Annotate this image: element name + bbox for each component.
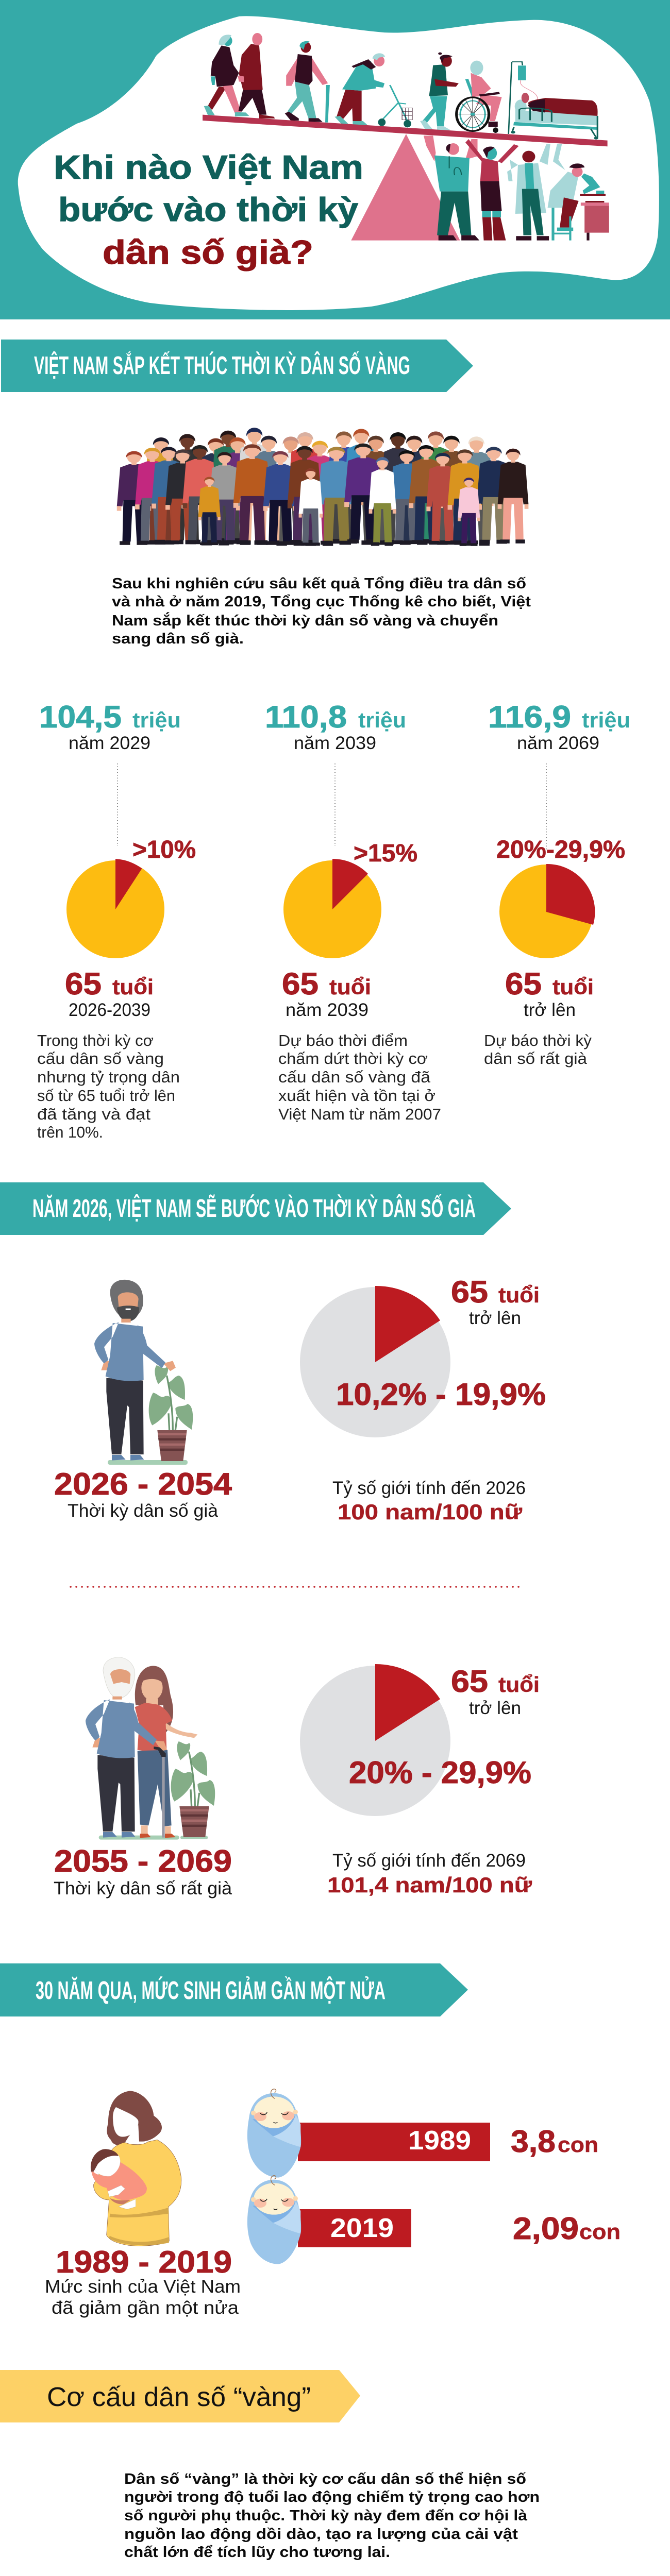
description: Việt Nam từ năm 2007	[278, 1105, 441, 1123]
description: chấm dứt thời kỳ cơ	[278, 1049, 428, 1067]
man with cane	[285, 41, 330, 123]
column: 2029	[37, 700, 196, 1141]
value 3,8 con	[511, 2124, 598, 2159]
intro paragraph: và nhà ở năm 2019, Tổng cục Thống kê cho biết, Việt	[112, 594, 531, 610]
age label 65	[65, 967, 154, 1020]
header banner	[0, 0, 670, 319]
pie chart: 10,2% - 19,9%	[300, 1275, 546, 1437]
pie chart >15%: >15%	[354, 840, 417, 867]
period label 1989-2019	[45, 2245, 241, 2318]
value 2,09 con: 2,09	[513, 2211, 579, 2246]
definition paragraph: người trong độ tuổi lao động chiếm tỷ trọng cao hơn	[124, 2489, 540, 2505]
population figure 2039: năm 2039	[294, 733, 376, 753]
label 65 tuổi trở lên: trở lên	[469, 1698, 521, 1718]
period label 2055-2069: 2055 - 2069	[54, 1844, 232, 1878]
age label 65: tuổi	[552, 975, 594, 999]
label 65 tuổi trở lên: 65	[451, 1275, 488, 1309]
description: dân số rất già	[484, 1049, 588, 1067]
pie chart: 20% - 29,9%: 20% - 29,9%	[349, 1755, 531, 1790]
pie chart: 10,2% - 19,9%: 10,2% - 19,9%	[336, 1377, 546, 1412]
description	[278, 1031, 441, 1123]
scientist with microscope	[548, 144, 609, 241]
population figure 2069: triệu	[582, 708, 630, 732]
value 2,09 con: con	[579, 2219, 621, 2244]
description: đã tăng và đạt	[37, 1105, 150, 1123]
definition paragraph	[124, 2471, 540, 2561]
age label 65: năm 2039	[286, 1000, 368, 1020]
intro paragraph: Sau khi nghiên cứu sâu kết quả Tổng điều tra dân số	[112, 575, 526, 592]
walking elderly couple	[204, 33, 275, 118]
title: Khi nào Việt Nam	[54, 148, 363, 186]
section heading: fertility falls by half	[0, 1963, 468, 2016]
population figure 2069: năm 2069	[517, 733, 599, 753]
pie chart 20%-29,9%: 20%-29,9%	[496, 836, 625, 863]
age label 65: 2026-2039	[69, 1000, 150, 1020]
description: trên 10%.	[37, 1123, 103, 1141]
label 65 tuổi trở lên	[451, 1275, 540, 1328]
seesaw fulcrum	[351, 134, 460, 241]
section heading: fertility falls by half: 30 NĂM QUA, MỨC SINH GIẢM GẦN MỘT NỬA	[36, 1976, 386, 2005]
intro paragraph: Nam sắp kết thúc thời kỳ dân số vàng và chuyển	[112, 612, 498, 629]
description	[37, 1031, 180, 1141]
pie chart >15%	[283, 840, 417, 958]
value 3,8 con: 3,8	[511, 2124, 556, 2159]
pie chart >10%	[66, 836, 196, 958]
icon: baby 2019	[247, 2176, 301, 2264]
intro paragraph: sang dân số già.	[112, 631, 244, 647]
value 2,09 con	[513, 2211, 621, 2246]
age label 65: trở lên	[524, 1000, 576, 1020]
population figure 2029: triệu	[132, 708, 181, 732]
period label 2055-2069: Thời kỳ dân số rất già	[54, 1878, 232, 1899]
definition paragraph: chất lớn để tích lũy cho tương lai.	[124, 2544, 390, 2561]
illustration: elderly couple with plant	[86, 1657, 215, 1840]
age label 65: 65	[505, 967, 542, 1001]
bar: 1989: 1989	[408, 2126, 471, 2156]
title: dân số già?	[103, 233, 313, 271]
description: Dự báo thời kỳ	[484, 1031, 592, 1049]
sex ratio 2026	[332, 1478, 526, 1524]
illustration: mother with baby	[91, 2091, 181, 2246]
doctor in lab coat	[507, 144, 550, 241]
doctor lifting beam	[424, 135, 479, 241]
sex ratio 2026: Tỷ số giới tính đến 2026	[332, 1478, 526, 1498]
definition paragraph: Dân số “vàng” là thời kỳ cơ cấu dân số thể hiện số	[124, 2471, 526, 2487]
label 65 tuổi trở lên: tuổi	[498, 1283, 540, 1307]
age label 65: tuổi	[112, 975, 154, 999]
population figure 2039: triệu	[358, 708, 406, 732]
population figure 2039: 110,8	[265, 700, 347, 734]
section heading: golden structure: Cơ cấu dân số “vàng”	[47, 2382, 311, 2412]
definition paragraph: số người phụ thuộc. Thời kỳ này đem đến cơ hội là	[124, 2507, 528, 2524]
description: số từ 65 tuổi trở lên	[37, 1087, 175, 1105]
label 65 tuổi trở lên: 65	[451, 1664, 488, 1699]
column: 2069	[484, 700, 630, 1067]
sex ratio 2069	[327, 1851, 532, 1897]
title	[54, 148, 363, 271]
population figure 2029: năm 2029	[69, 733, 150, 753]
section heading: golden period ending	[1, 340, 473, 392]
population figure 2039	[265, 700, 406, 753]
pie chart: 20% - 29,9%	[300, 1664, 540, 1816]
value 3,8 con: con	[558, 2132, 598, 2157]
age label 65: 65	[282, 967, 319, 1001]
description	[484, 1031, 592, 1067]
old man with walker	[334, 53, 412, 127]
population figure 2029	[39, 700, 181, 753]
label 65 tuổi trở lên: tuổi	[498, 1672, 540, 1697]
white blob background	[18, 16, 659, 310]
population figure 2069: 116,9	[488, 700, 571, 734]
description: nhưng tỷ trọng dân	[37, 1068, 180, 1086]
period label 2026-2054	[54, 1467, 232, 1521]
pie chart >10%: >10%	[132, 836, 196, 863]
bar: 2019	[298, 2209, 411, 2247]
description: Trong thời kỳ cơ	[37, 1031, 154, 1049]
illustration: man with plant	[94, 1280, 193, 1465]
icon: baby 1989	[247, 2089, 301, 2178]
population figure 2029: 104,5	[39, 700, 122, 734]
age label 65	[282, 967, 371, 1020]
description: xuất hiện và tồn tại ở	[278, 1087, 435, 1105]
description: cấu dân số vàng đã	[278, 1068, 431, 1086]
population figure 2069	[488, 700, 630, 753]
column: 2039	[265, 700, 441, 1123]
sex ratio 2026: 100 nam/100 nữ	[338, 1500, 523, 1524]
period label 2026-2054: Thời kỳ dân số già	[68, 1501, 219, 1521]
definition paragraph: nguồn lao động dồi dào, tạo ra lượng của cải vật	[124, 2526, 518, 2543]
age label 65	[505, 967, 594, 1020]
nurse and wheelchair patient	[420, 53, 502, 133]
bar: 2019: 2019	[330, 2213, 394, 2243]
description: Dự báo thời điểm	[278, 1031, 408, 1049]
period label 1989-2019: Mức sinh của Việt Nam	[45, 2277, 241, 2297]
period label 2055-2069	[54, 1844, 232, 1899]
hospital bed and IV pole	[509, 62, 598, 140]
pie chart 20%-29,9%	[496, 836, 625, 958]
intro paragraph	[112, 575, 531, 647]
title: bước vào thời kỳ	[58, 191, 358, 228]
age label 65: tuổi	[329, 975, 371, 999]
section heading: entering ageing period in 2026	[0, 1182, 511, 1235]
section heading: golden period ending: VIỆT NAM SẮP KẾT THÚC THỜI KỲ DÂN SỐ VÀNG	[34, 351, 410, 380]
label 65 tuổi trở lên: trở lên	[469, 1308, 521, 1328]
bar: 1989	[298, 2123, 490, 2161]
label 65 tuổi trở lên	[451, 1664, 540, 1718]
seesaw beam	[203, 115, 608, 146]
illustration: crowd of people	[117, 428, 528, 546]
sex ratio 2069: 101,4 nam/100 nữ	[327, 1873, 532, 1897]
period label 2026-2054: 2026 - 2054	[54, 1467, 232, 1501]
woman lifting beam	[465, 139, 519, 241]
period label 1989-2019: đã giảm gần một nửa	[52, 2298, 239, 2318]
sex ratio 2069: Tỷ số giới tính đến 2069	[332, 1851, 526, 1871]
age label 65: 65	[65, 967, 102, 1001]
section heading: golden structure	[0, 2370, 360, 2422]
description: cấu dân số vàng	[37, 1049, 164, 1067]
period label 1989-2019: 1989 - 2019	[56, 2245, 232, 2279]
illustration: ageing seesaw	[203, 33, 609, 241]
